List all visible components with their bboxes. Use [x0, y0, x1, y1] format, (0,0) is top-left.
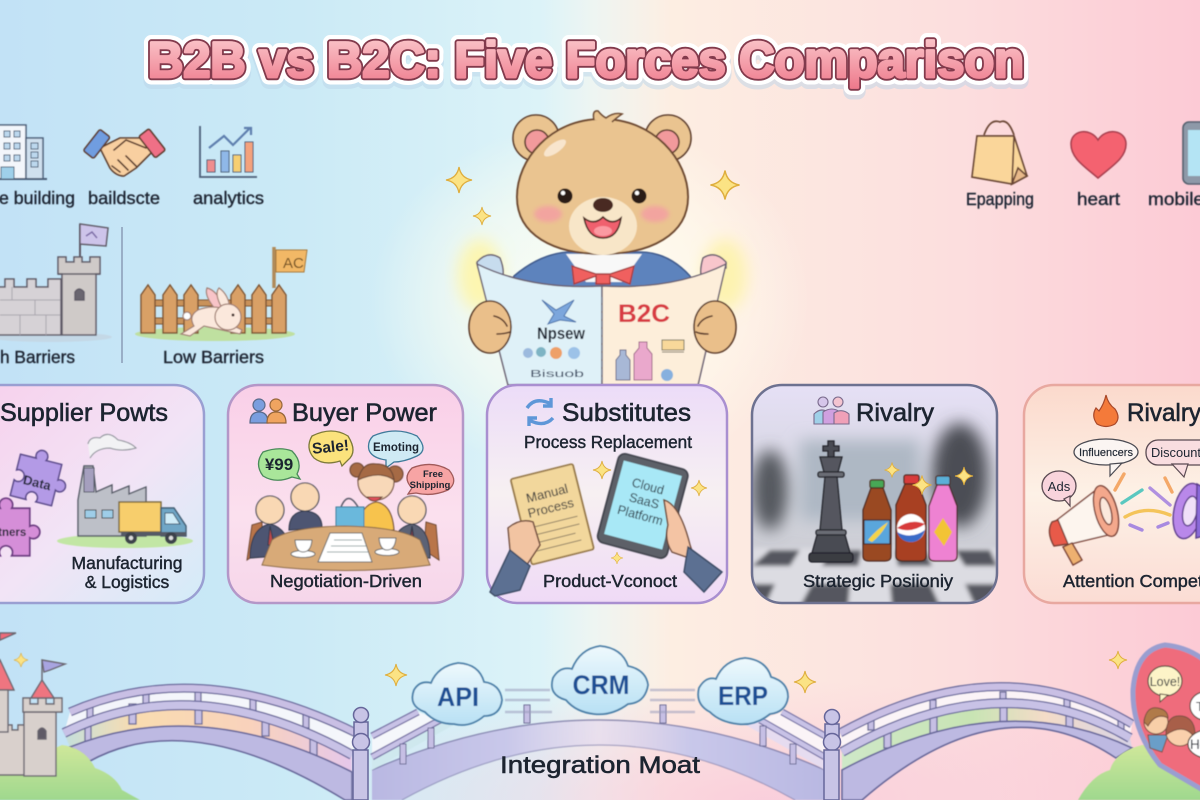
tuft	[594, 111, 622, 122]
bear jacket	[506, 252, 700, 300]
hill	[0, 745, 140, 800]
nose and mouth	[584, 198, 621, 238]
bubble: love: Love!	[1150, 675, 1180, 689]
heading: Substitutes	[562, 399, 691, 427]
white gap between rails	[64, 688, 358, 755]
newspaper right side content	[616, 300, 684, 381]
tea cups	[291, 538, 399, 558]
castle on green hill	[0, 633, 140, 800]
icon: castle wall	[0, 224, 112, 342]
speech bubbles: Influencers	[1079, 447, 1133, 459]
label: heart: heart	[1077, 189, 1120, 209]
newspaper	[477, 255, 726, 385]
cheeks	[534, 206, 669, 222]
manual process scroll	[511, 464, 594, 565]
castle	[0, 633, 65, 776]
checker floor	[752, 548, 997, 606]
low barriers fence and rabbit	[135, 247, 307, 367]
puzzle pieces: Data	[22, 472, 53, 494]
icon: heart	[1071, 132, 1126, 178]
icon: swap arrows	[527, 398, 553, 426]
small posts	[400, 705, 796, 764]
small sparkle	[14, 653, 28, 667]
sub heading: Process Replacement	[524, 432, 692, 452]
bubble: T	[1190, 692, 1200, 720]
tablet: SaaS	[627, 490, 661, 512]
bottles	[863, 475, 957, 561]
negotiation table scene	[247, 463, 439, 570]
bear head	[517, 119, 688, 254]
bear hands	[469, 301, 736, 353]
speech bubbles: Shipping	[410, 480, 451, 491]
label: building: e building	[0, 188, 75, 208]
integration clouds	[412, 646, 788, 725]
caption: Manufacturing	[72, 553, 182, 573]
highlight	[541, 136, 569, 160]
cloud: CRM: CRM	[572, 670, 630, 700]
speech bubbles	[1042, 439, 1200, 506]
caption line 2: & Logistics	[85, 572, 170, 592]
speech bubbles: ¥99	[265, 455, 293, 474]
muzzle	[569, 197, 637, 255]
icon: shopping bag	[972, 121, 1027, 184]
small sparkles	[593, 461, 707, 564]
caption: Product-Vconoct	[543, 571, 677, 591]
icon: mobile phone	[1183, 122, 1200, 184]
card: substitutes	[487, 385, 727, 603]
icon: people	[814, 397, 849, 424]
people	[1144, 708, 1195, 752]
label: low barriers: Low Barriers	[163, 347, 264, 367]
newspaper right side content: B2C	[618, 300, 670, 328]
title: B2B vs B2C: Five Forces Comparison	[148, 36, 1024, 92]
card: buyer power	[228, 385, 463, 603]
speech bubbles: Free	[423, 469, 443, 480]
eyes	[558, 188, 646, 204]
bridge sparkles	[385, 651, 1127, 693]
cloud: API: API	[437, 682, 479, 712]
icon: flame	[1094, 395, 1118, 426]
icon: fence: AC	[283, 255, 304, 272]
cloud: CRM	[552, 646, 648, 714]
heart community bubble	[1133, 645, 1200, 800]
heading: Supplier Powts	[0, 399, 168, 427]
integration moat label: Integration Moat	[500, 752, 700, 779]
high barriers castle	[0, 224, 112, 367]
caption: Negotiation-Driven	[270, 571, 422, 591]
speech bubbles	[258, 431, 454, 494]
bear glow	[458, 239, 502, 311]
bubble: love	[1148, 666, 1182, 702]
puzzle pieces	[0, 445, 73, 556]
bear ears	[513, 115, 691, 161]
megaphone left	[1049, 483, 1123, 565]
heading: Buyer Power	[292, 399, 437, 427]
document	[318, 533, 372, 562]
left hand	[490, 521, 540, 596]
label: mobile: mobile	[1148, 189, 1200, 209]
icon: office building	[0, 125, 47, 179]
cloud: ERP: ERP	[718, 681, 768, 711]
speech bubbles: Ads	[1048, 479, 1071, 494]
right green hill	[1078, 745, 1200, 800]
faint rails between clouds	[505, 690, 695, 712]
label: shopping: Epapping	[966, 189, 1034, 209]
manual process scroll: Process	[526, 495, 576, 521]
caption: Attention Compet	[1063, 571, 1200, 591]
newspaper left side content: Npsew	[537, 324, 586, 343]
title: B2B vs B2C: Five Forces Comparison	[148, 32, 1024, 88]
B2C icon row	[966, 121, 1200, 209]
speech bubbles: Emoting	[373, 442, 419, 454]
card: supplier power	[0, 385, 204, 603]
chess king	[809, 441, 853, 562]
sound rays	[1115, 474, 1172, 530]
rails	[70, 688, 358, 734]
side panels	[372, 712, 440, 757]
sparkles	[884, 462, 973, 494]
girl	[350, 463, 403, 530]
divider	[121, 227, 123, 363]
tablet: Cloud	[630, 476, 666, 498]
cloud: ERP	[698, 658, 788, 724]
suited people	[250, 483, 430, 558]
speech bubbles: Sale!	[311, 437, 350, 458]
title: B2B vs B2C: Five Forces Comparison	[148, 32, 1024, 88]
newspaper left side content	[523, 300, 586, 380]
icon: handshake	[83, 129, 166, 176]
label: high barriers: h Barriers	[0, 347, 75, 367]
sparkles around bear	[446, 167, 740, 225]
icon: analytics chart	[200, 126, 257, 177]
table	[262, 526, 430, 570]
icon: people	[250, 399, 286, 423]
shopping bag	[341, 498, 358, 507]
newspaper left side content: Bisuob	[530, 369, 585, 380]
label: analytics: analytics	[193, 188, 264, 208]
right bridge	[840, 687, 1132, 800]
title: B2B vs B2C: Five Forces Comparison	[148, 32, 1024, 88]
manual process scroll: Manual	[525, 481, 570, 506]
caption: Strategic Posiioniy	[803, 571, 953, 591]
card: B2C rivalry	[1024, 385, 1200, 603]
deck	[372, 720, 825, 800]
bubble: He	[1188, 729, 1200, 759]
posts	[85, 690, 317, 756]
label: handshake word: baildscte	[88, 188, 160, 208]
cloud: API	[412, 663, 502, 725]
middle bridge	[372, 690, 825, 800]
icon: rabbit	[181, 288, 242, 336]
megaphone right	[1168, 481, 1200, 541]
rails	[372, 712, 825, 757]
tablet: Platform	[616, 503, 664, 528]
arch	[70, 726, 352, 800]
bridge posts	[352, 708, 840, 800]
right hand	[664, 500, 722, 592]
heading: Rivalry	[856, 399, 934, 427]
factory and truck	[57, 434, 193, 548]
card: B2B rivalry	[752, 385, 997, 606]
tablet	[596, 452, 689, 560]
icon: fence	[135, 247, 307, 341]
left bridge	[64, 688, 358, 800]
bow tie	[572, 266, 634, 284]
deck panels	[64, 705, 352, 772]
blurred background scene	[752, 423, 997, 606]
bear mascot	[458, 111, 747, 385]
B2B icon row	[0, 125, 264, 208]
